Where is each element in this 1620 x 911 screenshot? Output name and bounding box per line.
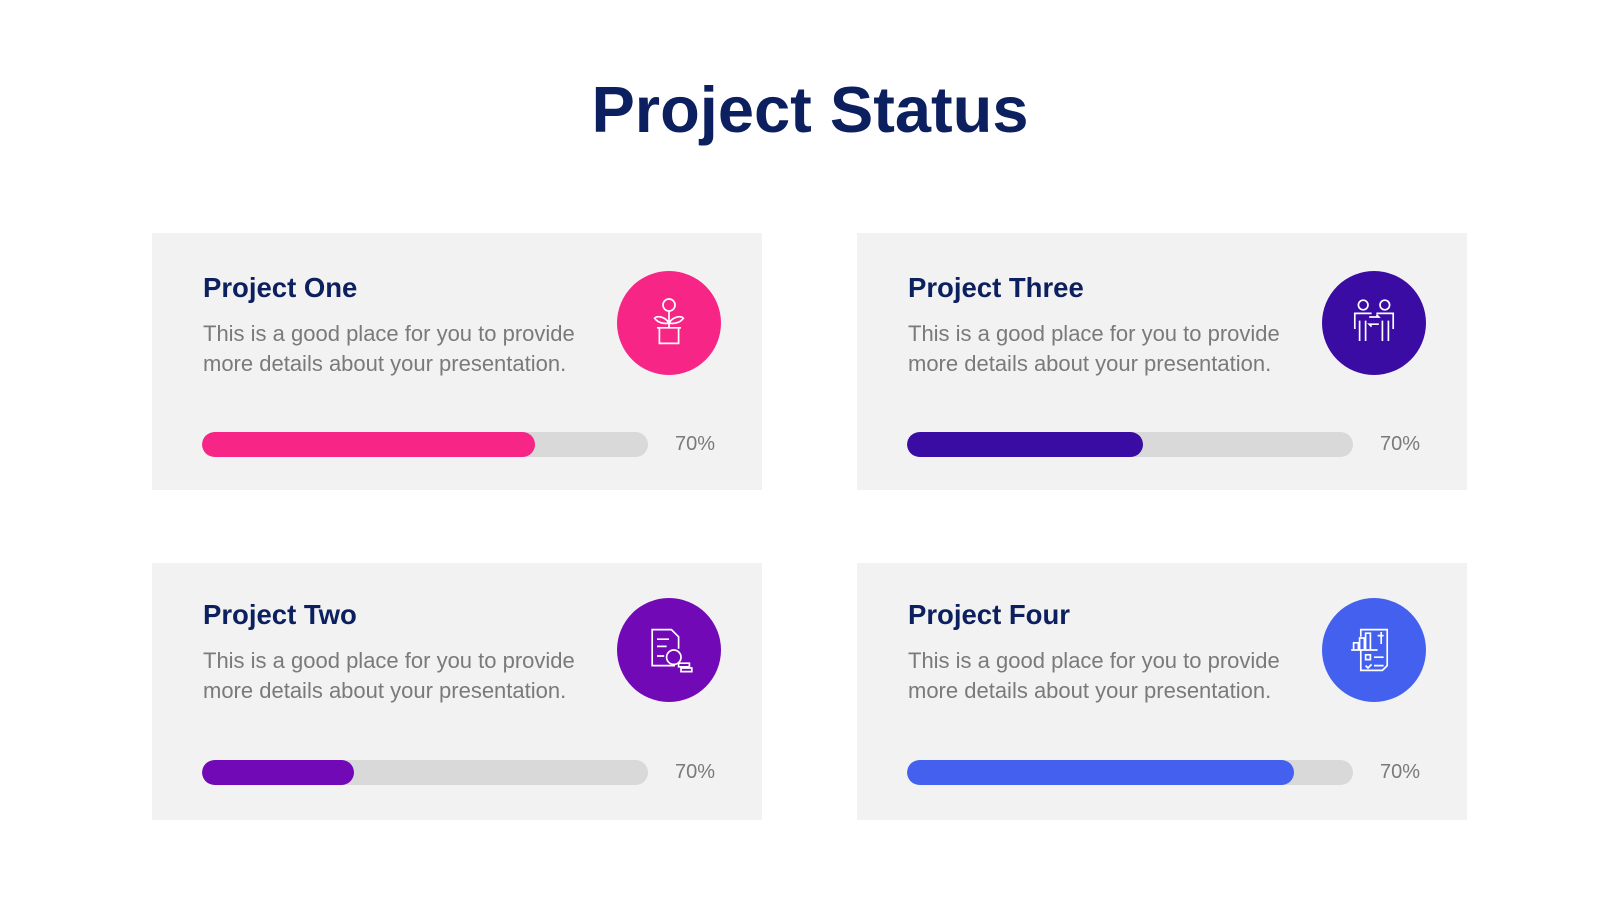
panel: project four bbox=[857, 563, 1467, 820]
heading: Project Three bbox=[908, 272, 1084, 303]
text block bbox=[203, 648, 575, 703]
text block bbox=[203, 321, 575, 376]
heading: Project Two bbox=[203, 599, 357, 630]
text block: more details about your presentation. bbox=[203, 351, 566, 376]
icon: document with coin bbox=[617, 598, 721, 702]
text block: This is a good place for you to provide bbox=[908, 321, 1280, 346]
bar chart: progress bbox=[907, 760, 1353, 785]
icon: financial report bbox=[1322, 598, 1426, 702]
heading: Project One bbox=[203, 272, 357, 303]
panel: project three bbox=[857, 233, 1467, 490]
panel: project two bbox=[152, 563, 762, 820]
text block bbox=[908, 321, 1280, 376]
percentage label: 70% bbox=[675, 433, 715, 455]
title: Project Status bbox=[591, 73, 1029, 146]
percentage label: 70% bbox=[675, 761, 715, 783]
bar chart: progress bbox=[202, 760, 648, 785]
percentage label: 70% bbox=[1380, 761, 1420, 783]
text block: This is a good place for you to provide bbox=[908, 648, 1280, 673]
bar chart: progress bbox=[202, 432, 648, 457]
text block: more details about your presentation. bbox=[203, 678, 566, 703]
text block bbox=[908, 648, 1280, 703]
icon: plant with coin bbox=[617, 271, 721, 375]
text block: more details about your presentation. bbox=[908, 351, 1271, 376]
panel: project one bbox=[152, 233, 762, 490]
text block: This is a good place for you to provide bbox=[203, 321, 575, 346]
heading: Project Four bbox=[908, 599, 1070, 630]
bar chart: progress bbox=[907, 432, 1353, 457]
text block: This is a good place for you to provide bbox=[203, 648, 575, 673]
text block: more details about your presentation. bbox=[908, 678, 1271, 703]
percentage label: 70% bbox=[1380, 433, 1420, 455]
icon: two people exchange bbox=[1322, 271, 1426, 375]
